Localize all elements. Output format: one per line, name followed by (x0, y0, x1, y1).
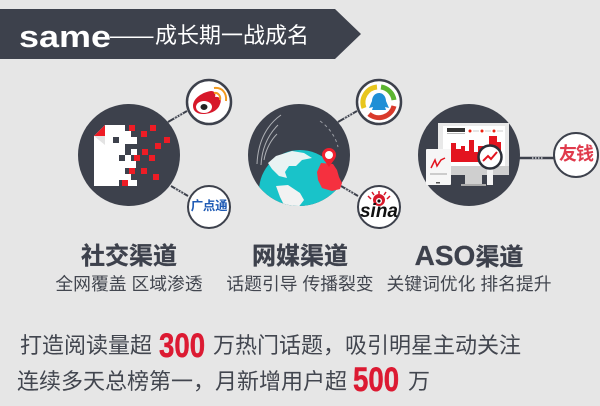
title: —— (110, 23, 153, 48)
subheading: social: 全网覆盖 区域渗透 (55, 274, 203, 294)
icon: youqian (553, 132, 599, 178)
text line 2 (17, 361, 430, 399)
text line 2: 万 (408, 369, 430, 394)
icon: sina (357, 185, 401, 229)
heading: social: 社交渠道 (81, 243, 177, 270)
icon: sina: sina (360, 201, 398, 222)
title: 成长期一战成名 (155, 23, 309, 48)
icon: guangdiantong (187, 185, 231, 229)
heading: ASO: ASO渠道 (415, 240, 523, 271)
title: same (19, 19, 111, 54)
icon: youqian: 友钱 (559, 144, 593, 164)
text line 2: 连续多天总榜第一，月新增用户超 (17, 369, 347, 394)
text line 1 (20, 327, 521, 365)
title (19, 19, 309, 54)
text line 1: 万热门话题，吸引明星主动关注 (213, 333, 521, 358)
icon: guangdiantong: 广点通 (191, 199, 227, 213)
panel: media channels icon group (248, 104, 358, 206)
text line 2: 500 (353, 361, 399, 399)
heading: media: 网媒渠道 (252, 243, 348, 270)
text line 1: 300 (159, 327, 205, 365)
subheading: ASO: 关键词优化 排名提升 (386, 274, 551, 294)
text line 1: 打造阅读量超 (20, 333, 152, 358)
subheading: media: 话题引导 传播裂变 (226, 274, 374, 294)
